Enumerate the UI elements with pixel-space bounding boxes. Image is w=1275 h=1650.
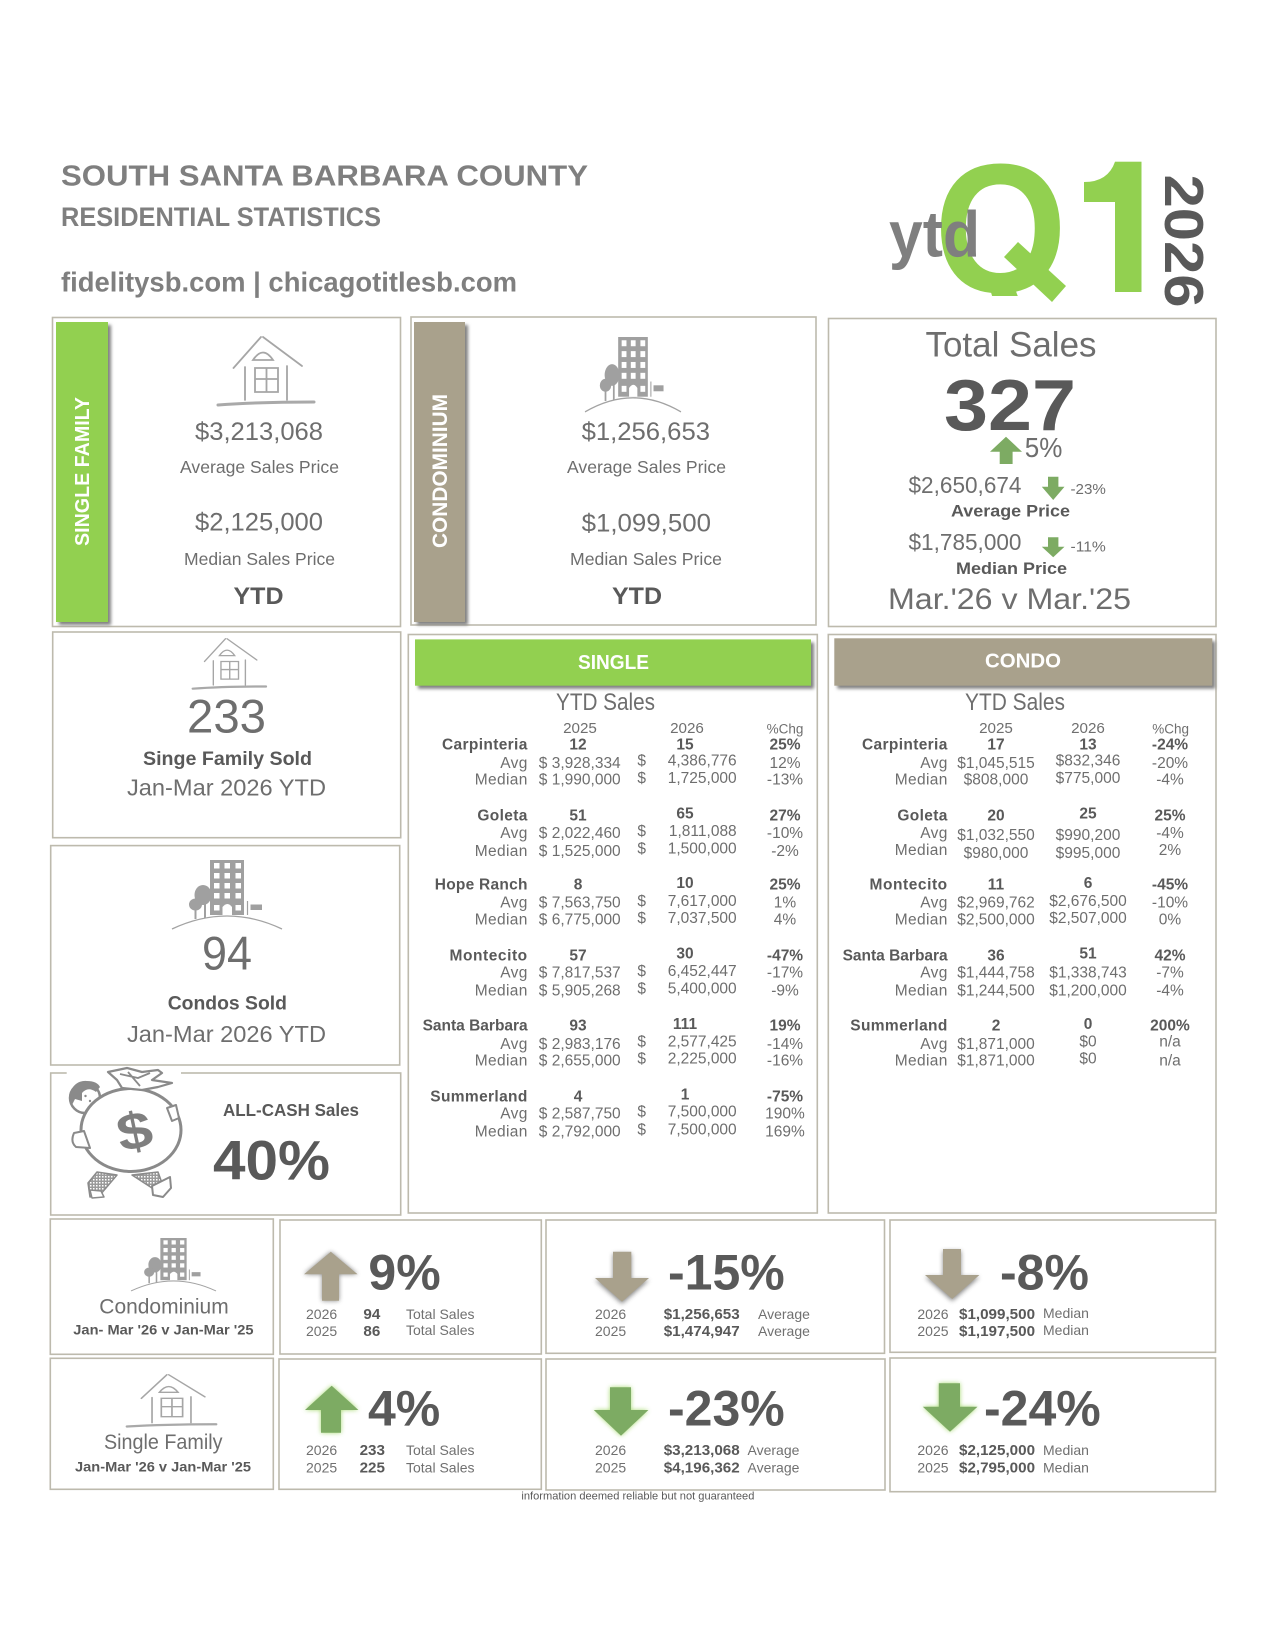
row: Montecito	[870, 875, 1188, 929]
average price: $1,256,653	[582, 418, 710, 446]
row: Goleta: $1,032,550	[957, 827, 1035, 844]
row: Summerland: 7,500,000	[668, 1122, 737, 1139]
row: Santa Barbara: Median	[895, 983, 948, 1000]
Q large letter	[941, 164, 1066, 302]
detail lines: 225	[360, 1459, 385, 1476]
row: Summerland: -75%	[767, 1088, 803, 1105]
row: Goleta: 65	[676, 806, 694, 823]
row: Goleta: 51	[569, 807, 587, 824]
side bar: single family	[56, 322, 111, 625]
detail lines: 2025	[917, 1459, 949, 1475]
row: Summerland: Avg	[500, 1105, 528, 1122]
count: 94	[202, 928, 252, 981]
count: 233	[187, 691, 266, 744]
row: Montecito: $	[637, 981, 646, 998]
row: Summerland: Summerland	[430, 1088, 528, 1105]
row: Goleta: $995,000	[1056, 845, 1121, 862]
average label: Average Sales Price	[180, 457, 339, 477]
row: Montecito: -45%	[1152, 877, 1188, 894]
detail lines: Total Sales	[406, 1442, 474, 1458]
row: Hope Ranch: 8	[574, 877, 583, 894]
header bar: condo	[834, 638, 1215, 689]
detail lines: 94	[363, 1306, 381, 1323]
detail lines: Average	[748, 1459, 800, 1475]
row: Summerland: $1,871,000	[957, 1053, 1035, 1070]
row: Summerland: $1,871,000	[957, 1036, 1035, 1053]
row: Goleta: -10%	[767, 825, 803, 842]
label: Singe Family Sold	[143, 748, 312, 770]
YTD label: YTD	[612, 583, 662, 610]
arrow: down green	[594, 1387, 648, 1436]
detail lines: Total Sales	[406, 1459, 474, 1475]
row: Santa Barbara: $1,244,500	[957, 983, 1035, 1000]
icon: condo building	[131, 1238, 216, 1291]
row: Goleta	[475, 806, 803, 860]
row: Santa Barbara: 19%	[769, 1017, 801, 1034]
header bar: condo: CONDO	[985, 651, 1061, 673]
icon: condo building	[172, 860, 282, 929]
detail lines: $4,196,362	[664, 1459, 740, 1476]
row: Hope Ranch: $	[637, 893, 646, 910]
panel: single family median price change	[890, 1358, 1216, 1492]
panel: single family total sales change	[279, 1359, 541, 1489]
row: Summerland: $ 2,792,000	[539, 1123, 621, 1140]
detail lines: 2025	[595, 1323, 626, 1339]
median label: Median Price	[956, 559, 1067, 578]
period: Jan-Mar '26 v Jan-Mar '25	[75, 1460, 252, 1475]
column headers: 2026	[1071, 720, 1105, 737]
median label: Median Sales Price	[184, 549, 335, 569]
row: Santa Barbara: 93	[569, 1017, 587, 1034]
column headers	[563, 720, 803, 737]
side bar: condominium	[414, 322, 468, 625]
row: Santa Barbara	[423, 1016, 803, 1070]
arrow: up tan	[304, 1252, 358, 1301]
row: Montecito: Median	[895, 912, 948, 929]
row: Summerland: Median	[895, 1053, 948, 1070]
row: Carpinteria: Avg	[500, 755, 528, 772]
row: Carpinteria: 4,386,776	[668, 753, 737, 770]
column headers	[979, 720, 1189, 737]
row: Carpinteria: -20%	[1152, 755, 1188, 772]
row: Santa Barbara: $1,338,743	[1049, 965, 1127, 982]
row: Carpinteria: $	[637, 753, 646, 770]
detail lines: $1,197,500	[959, 1323, 1035, 1340]
row: Carpinteria: 1,725,000	[668, 770, 737, 787]
comparison period: Mar.'26 v Mar.'25	[888, 583, 1131, 616]
percent change: 9%	[368, 1245, 441, 1301]
detail lines: 2026	[917, 1442, 949, 1458]
row: Montecito: Avg	[500, 965, 528, 982]
period: Jan-Mar 2026 YTD	[127, 774, 326, 800]
row: Hope Ranch: Avg	[500, 895, 528, 912]
row: Hope Ranch: Hope Ranch	[435, 877, 528, 894]
change -23%: -23%	[1070, 481, 1106, 498]
heading: Total Sales	[926, 326, 1096, 365]
row: Carpinteria: $832,346	[1056, 753, 1120, 770]
detail lines: Median	[1043, 1322, 1089, 1338]
row: Carpinteria: $808,000	[964, 772, 1029, 789]
detail lines: Median	[1043, 1442, 1089, 1458]
panel: condo median price change	[890, 1220, 1216, 1352]
row: Montecito: Montecito	[450, 947, 528, 964]
icon: house	[218, 337, 314, 405]
row: Santa Barbara: Median	[475, 1053, 528, 1070]
row: Hope Ranch: 4%	[774, 912, 796, 929]
row: Montecito: 6	[1084, 875, 1093, 892]
average price: $3,213,068	[195, 418, 323, 446]
label: ALL-CASH Sales	[223, 1100, 359, 1120]
row: Carpinteria: $775,000	[1056, 770, 1121, 787]
row: Summerland: $0	[1079, 1033, 1097, 1050]
total count: 327	[944, 366, 1076, 446]
detail lines: Median	[1043, 1305, 1089, 1321]
row: Montecito: -17%	[767, 965, 803, 982]
row: Hope Ranch: 10	[676, 875, 694, 892]
percent change: -24%	[984, 1380, 1101, 1436]
row: Montecito: $2,969,762	[957, 895, 1035, 912]
change -11%: -11%	[1070, 539, 1106, 556]
panel: single family average price change	[546, 1359, 885, 1490]
row: Goleta: $ 1,525,000	[539, 843, 621, 860]
label: Condominium	[99, 1295, 229, 1318]
detail lines: 2026	[306, 1442, 337, 1458]
heading: Residential Statistics: RESIDENTIAL STATISTICS	[61, 202, 381, 232]
row: Santa Barbara: 51	[1079, 946, 1097, 963]
row: Goleta: Goleta	[477, 807, 528, 824]
detail lines: $1,099,500	[959, 1306, 1035, 1323]
detail lines: 2026	[595, 1306, 626, 1322]
arrow: up green	[305, 1386, 358, 1433]
row: Summerland: 0	[1084, 1016, 1092, 1033]
1 large numeral	[1084, 162, 1142, 292]
panel: single YTD sales table	[408, 634, 817, 1213]
percent change: -8%	[1000, 1245, 1089, 1301]
arrow: down tan	[925, 1249, 979, 1301]
row: Goleta: Goleta	[897, 807, 948, 824]
row: Hope Ranch: 25%	[769, 877, 801, 894]
row: Carpinteria: $ 3,928,334	[539, 755, 621, 772]
row: Hope Ranch	[435, 875, 801, 929]
table heading: YTD Sales	[965, 689, 1065, 716]
row: Summerland: 2	[992, 1017, 1000, 1034]
percent change: -23%	[668, 1380, 785, 1436]
row: Santa Barbara	[843, 946, 1186, 1000]
detail lines: Average	[758, 1306, 810, 1322]
row: Carpinteria: 12%	[769, 755, 801, 772]
detail lines	[306, 1442, 474, 1476]
row: Hope Ranch: 7,617,000	[668, 893, 737, 910]
row: Montecito: 0%	[1159, 912, 1181, 929]
row: Carpinteria: 15	[676, 737, 694, 754]
label: Single Family	[104, 1431, 223, 1454]
row: Carpinteria: Median	[475, 772, 528, 789]
row: Goleta: -2%	[771, 843, 799, 860]
1 large numeral: 1	[1075, 130, 1175, 331]
icon: house	[193, 639, 266, 689]
row: Montecito: -47%	[767, 947, 803, 964]
panel: single family YTD prices	[52, 318, 400, 626]
average label: Average Price	[951, 502, 1070, 521]
median price: $2,125,000	[195, 509, 323, 537]
row: Goleta: 25%	[1154, 807, 1186, 824]
row: Summerland: 1	[681, 1087, 690, 1104]
row: Santa Barbara: 111	[673, 1016, 697, 1033]
row: Goleta: 20	[987, 807, 1005, 824]
detail lines: 2026	[306, 1306, 337, 1322]
row: Goleta: Avg	[920, 825, 948, 842]
icon: condo building	[585, 337, 681, 412]
Q large letter: Q	[934, 125, 1067, 331]
row: Montecito: 5,400,000	[668, 981, 737, 998]
period badge: ytd Q1 2026	[890, 162, 1204, 306]
row: Santa Barbara: 42%	[1154, 947, 1186, 964]
row: Goleta: 1,500,000	[668, 841, 737, 858]
row: Santa Barbara: $1,444,758	[957, 965, 1035, 982]
row: Carpinteria: Carpinteria	[442, 737, 528, 754]
row: Hope Ranch: Median	[475, 912, 528, 929]
row: Montecito: $	[637, 963, 646, 980]
YTD label: YTD	[234, 583, 284, 610]
period: Jan-Mar 2026 YTD	[127, 1021, 326, 1047]
row: Montecito: -9%	[771, 983, 799, 1000]
row: Summerland: n/a	[1159, 1053, 1181, 1070]
side bar: single family: SINGLE FAMILY	[71, 397, 94, 546]
row: Summerland: $0	[1079, 1050, 1097, 1067]
detail lines	[595, 1442, 800, 1476]
row: Santa Barbara: 2,577,425	[668, 1033, 737, 1050]
arrow: down median	[1042, 537, 1064, 557]
row: Montecito	[450, 946, 803, 1000]
row: Goleta: 2%	[1159, 842, 1181, 859]
percentage: 40%	[213, 1128, 330, 1192]
table heading: YTD Sales	[556, 689, 655, 716]
panel: condo total sales change	[280, 1220, 541, 1354]
row: Summerland: Summerland	[850, 1017, 948, 1034]
row: Santa Barbara: $ 2,655,000	[539, 1053, 621, 1070]
row: Hope Ranch: 1%	[774, 895, 796, 912]
row: Summerland: 7,500,000	[668, 1103, 737, 1120]
row: Santa Barbara: -4%	[1156, 983, 1184, 1000]
arrow: down green	[923, 1383, 978, 1432]
detail lines: $2,125,000	[959, 1442, 1035, 1459]
row: Montecito: 6,452,447	[668, 963, 737, 980]
row: Santa Barbara: Avg	[920, 965, 948, 982]
row: Santa Barbara: $	[637, 1050, 646, 1067]
average label: Average Sales Price	[567, 457, 726, 477]
row: Carpinteria: $	[637, 770, 646, 787]
arrow: down tan	[595, 1252, 649, 1304]
median price: $1,099,500	[582, 510, 711, 538]
row: Goleta: $ 2,022,460	[539, 825, 621, 842]
row: Goleta: $980,000	[964, 845, 1029, 862]
row: Goleta: Median	[895, 842, 948, 859]
column headers: 2025	[979, 720, 1013, 737]
header bar: single: SINGLE	[578, 652, 649, 674]
row: Montecito: Montecito	[870, 877, 948, 894]
arrow: up 5%	[990, 437, 1022, 464]
row: Carpinteria: 12	[569, 737, 587, 754]
median price: $1,785,000	[908, 529, 1022, 555]
row: Goleta: $	[637, 841, 646, 858]
row: Montecito: Avg	[920, 895, 948, 912]
detail lines	[917, 1442, 1089, 1476]
row: Santa Barbara: $1,200,000	[1049, 983, 1127, 1000]
row: Summerland: $	[637, 1122, 646, 1139]
row: Carpinteria: 25%	[769, 737, 801, 754]
row: Carpinteria: $1,045,515	[957, 755, 1035, 772]
icon: house	[127, 1375, 216, 1427]
detail lines	[595, 1306, 810, 1340]
row: Summerland: $ 2,587,750	[539, 1105, 621, 1122]
row: Carpinteria: Carpinteria	[862, 737, 948, 754]
average price: $2,650,674	[908, 472, 1022, 498]
row: Santa Barbara: 2,225,000	[668, 1050, 737, 1067]
row: Santa Barbara: $	[637, 1033, 646, 1050]
side bar: condominium: CONDOMINIUM	[429, 394, 452, 548]
footer disclaimer: information deemed reliable but not guaranteed	[521, 1490, 754, 1502]
row: Hope Ranch: $ 6,775,000	[539, 912, 621, 929]
row: Goleta: -4%	[1156, 825, 1184, 842]
detail lines: $3,213,068	[664, 1442, 740, 1459]
detail lines: $1,256,653	[664, 1306, 740, 1323]
panel: condominium comparison label	[50, 1219, 273, 1354]
row: Summerland: n/a	[1159, 1033, 1181, 1050]
row: Carpinteria	[442, 737, 803, 789]
label: Condos Sold	[168, 992, 287, 1014]
panel: single family comparison label	[50, 1358, 273, 1489]
median label: Median Sales Price	[570, 549, 722, 569]
row: Goleta	[895, 806, 1186, 862]
detail lines: $1,474,947	[664, 1323, 740, 1340]
row: Summerland: $	[637, 1103, 646, 1120]
panel: single family sold	[53, 632, 401, 838]
row: Carpinteria	[862, 737, 1188, 789]
row: Goleta: $990,200	[1056, 827, 1121, 844]
row: Hope Ranch: $ 7,563,750	[539, 895, 621, 912]
detail lines: 2025	[917, 1323, 949, 1339]
row: Summerland: Avg	[920, 1036, 948, 1053]
row: Montecito: 57	[569, 947, 587, 964]
row: Hope Ranch: $	[637, 910, 646, 927]
detail lines: 2025	[306, 1323, 337, 1339]
row: Carpinteria: Avg	[920, 755, 948, 772]
panel: condo YTD sales table	[828, 634, 1216, 1213]
column headers: 2026	[670, 720, 704, 737]
detail lines: $2,795,000	[959, 1459, 1035, 1476]
detail lines: 86	[363, 1323, 380, 1340]
row: Santa Barbara: Santa Barbara	[843, 947, 948, 964]
row: Carpinteria: -24%	[1152, 737, 1188, 754]
row: Santa Barbara: Avg	[500, 1036, 528, 1053]
row: Montecito: 11	[988, 877, 1005, 894]
row: Hope Ranch: 7,037,500	[668, 910, 737, 927]
row: Montecito: $2,507,000	[1049, 910, 1127, 927]
row: Summerland: 4	[574, 1088, 583, 1105]
column headers: %Chg	[1152, 721, 1189, 736]
arrow: down average	[1042, 477, 1064, 500]
ytd label: ytd	[889, 198, 980, 271]
change 5%: 5%	[1025, 432, 1062, 463]
row: Carpinteria: -13%	[767, 772, 803, 789]
row: Montecito: $2,500,000	[957, 912, 1035, 929]
row: Summerland: Median	[475, 1123, 528, 1140]
panel: condos sold	[51, 846, 400, 1065]
percent change: 4%	[368, 1380, 440, 1436]
column headers: %Chg	[767, 721, 803, 736]
row: Santa Barbara: $ 2,983,176	[539, 1036, 621, 1053]
row: Summerland: 200%	[1150, 1017, 1190, 1034]
period: Jan- Mar '26 v Jan-Mar '25	[73, 1322, 254, 1337]
row: Santa Barbara: -14%	[767, 1036, 803, 1053]
row: Goleta: 27%	[769, 807, 801, 824]
row: Carpinteria: $ 1,990,000	[539, 772, 621, 789]
panel: condo average price change	[546, 1220, 884, 1353]
panel: condominium YTD prices	[411, 317, 816, 625]
detail lines	[917, 1305, 1089, 1340]
row: Carpinteria: 13	[1079, 737, 1097, 754]
row: Summerland: 169%	[765, 1123, 805, 1140]
heading: South Santa Barbara County: SOUTH SANTA BARBARA COUNTY	[61, 160, 588, 192]
row: Goleta: 25	[1079, 806, 1097, 823]
website links: fidelitysb.com | chicagotitlesb.com	[61, 267, 517, 298]
row: Carpinteria: Median	[895, 772, 948, 789]
row: Carpinteria: -4%	[1156, 772, 1184, 789]
row: Goleta: Median	[475, 843, 528, 860]
detail lines	[306, 1306, 474, 1340]
row: Carpinteria: 17	[987, 737, 1005, 754]
row: Summerland	[850, 1016, 1190, 1070]
panel: total sales	[828, 318, 1216, 626]
row: Summerland: 190%	[765, 1105, 805, 1122]
row: Santa Barbara: -16%	[767, 1053, 803, 1070]
row: Montecito: 30	[676, 946, 694, 963]
column headers: 2025	[563, 720, 597, 737]
row: Montecito: $2,676,500	[1049, 893, 1127, 910]
icon: man carrying money bag	[70, 1068, 181, 1198]
row: Montecito: Median	[475, 983, 528, 1000]
2026 vertical label: 2026	[1153, 174, 1215, 308]
detail lines: 233	[360, 1442, 385, 1459]
detail lines: Total Sales	[406, 1322, 474, 1338]
row: Goleta: Avg	[500, 825, 528, 842]
detail lines: Average	[748, 1442, 800, 1458]
detail lines: 2026	[595, 1442, 626, 1458]
header bar: single	[415, 639, 814, 689]
row: Summerland	[430, 1087, 805, 1140]
row: Montecito: $ 7,817,537	[539, 965, 621, 982]
panel: all-cash sales	[51, 1068, 401, 1215]
detail lines: Median	[1043, 1459, 1089, 1475]
detail lines: Average	[758, 1323, 810, 1339]
percent change: -15%	[668, 1245, 785, 1301]
row: Montecito: $ 5,905,268	[539, 983, 621, 1000]
row: Santa Barbara: Santa Barbara	[423, 1017, 528, 1034]
row: Goleta: 1,811,088	[669, 823, 737, 840]
row: Santa Barbara: 36	[987, 947, 1005, 964]
detail lines: 2025	[595, 1459, 626, 1475]
detail lines: 2026	[917, 1306, 949, 1322]
row: Montecito: -10%	[1152, 895, 1188, 912]
detail lines: Total Sales	[406, 1306, 474, 1322]
row: Santa Barbara: -7%	[1156, 965, 1184, 982]
icon: man carrying money bag: $	[112, 1100, 158, 1164]
row: Goleta: $	[637, 823, 646, 840]
detail lines: 2025	[306, 1459, 337, 1475]
